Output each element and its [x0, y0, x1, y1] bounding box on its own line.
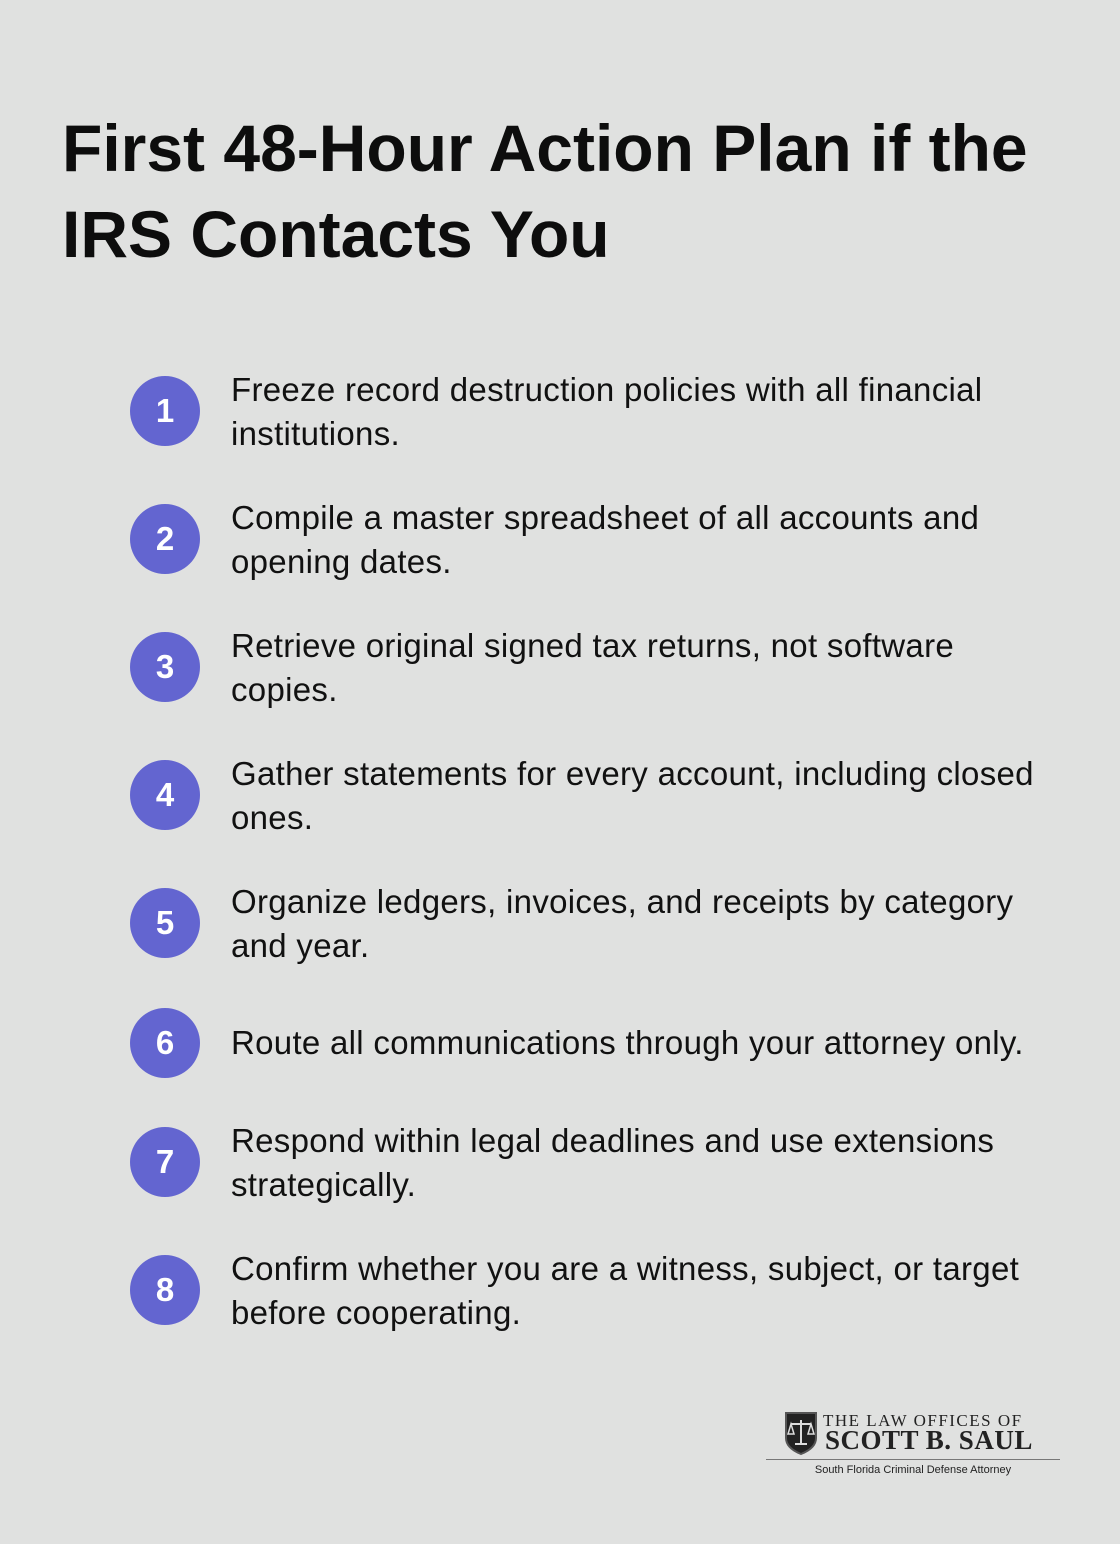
- step 1: [130, 371, 982, 452]
- step 8: before cooperating.: [231, 1294, 521, 1331]
- step 6: Route all communications through your attorney only.: [231, 1024, 1024, 1061]
- step 3: [130, 627, 954, 708]
- step 2: Compile a master spreadsheet of all accounts and: [231, 499, 979, 536]
- step 3: copies.: [231, 671, 338, 708]
- step 5: Organize ledgers, invoices, and receipts by category: [231, 883, 1013, 920]
- step 5: [130, 883, 1013, 964]
- step 4: 4: [156, 776, 174, 813]
- step 7: strategically.: [231, 1166, 416, 1203]
- title: [62, 111, 1028, 271]
- step 7: 7: [156, 1143, 174, 1180]
- step 8: Confirm whether you are a witness, subject, or target: [231, 1250, 1019, 1287]
- icon: shield: [785, 1412, 817, 1455]
- step 2: [130, 499, 979, 580]
- step 1: 1: [156, 392, 174, 429]
- title: First 48-Hour Action Plan if the: [62, 111, 1028, 185]
- step 6: [130, 1008, 1024, 1078]
- step 4: Gather statements for every account, including closed: [231, 755, 1034, 792]
- step 2: 2: [156, 520, 174, 557]
- step 5: and year.: [231, 927, 369, 964]
- step 3: Retrieve original signed tax returns, not software: [231, 627, 954, 664]
- step 2: opening dates.: [231, 543, 452, 580]
- step 3: 3: [156, 648, 174, 685]
- title: IRS Contacts You: [62, 197, 610, 271]
- step 6: 6: [156, 1024, 174, 1061]
- step 5: 5: [156, 904, 174, 941]
- step 4: [130, 755, 1034, 836]
- step 1: institutions.: [231, 415, 400, 452]
- step 1: Freeze record destruction policies with all financial: [231, 371, 982, 408]
- step 7: [130, 1122, 994, 1203]
- logo: SCOTT B. SAUL: [825, 1425, 1033, 1455]
- logo: [766, 1411, 1060, 1476]
- step 8: 8: [156, 1271, 174, 1308]
- step 8: [130, 1250, 1019, 1331]
- step 7: Respond within legal deadlines and use extensions: [231, 1122, 994, 1159]
- logo: South Florida Criminal Defense Attorney: [815, 1464, 1011, 1476]
- step 4: ones.: [231, 799, 313, 836]
- logo: THE LAW OFFICES OF: [823, 1411, 1023, 1430]
